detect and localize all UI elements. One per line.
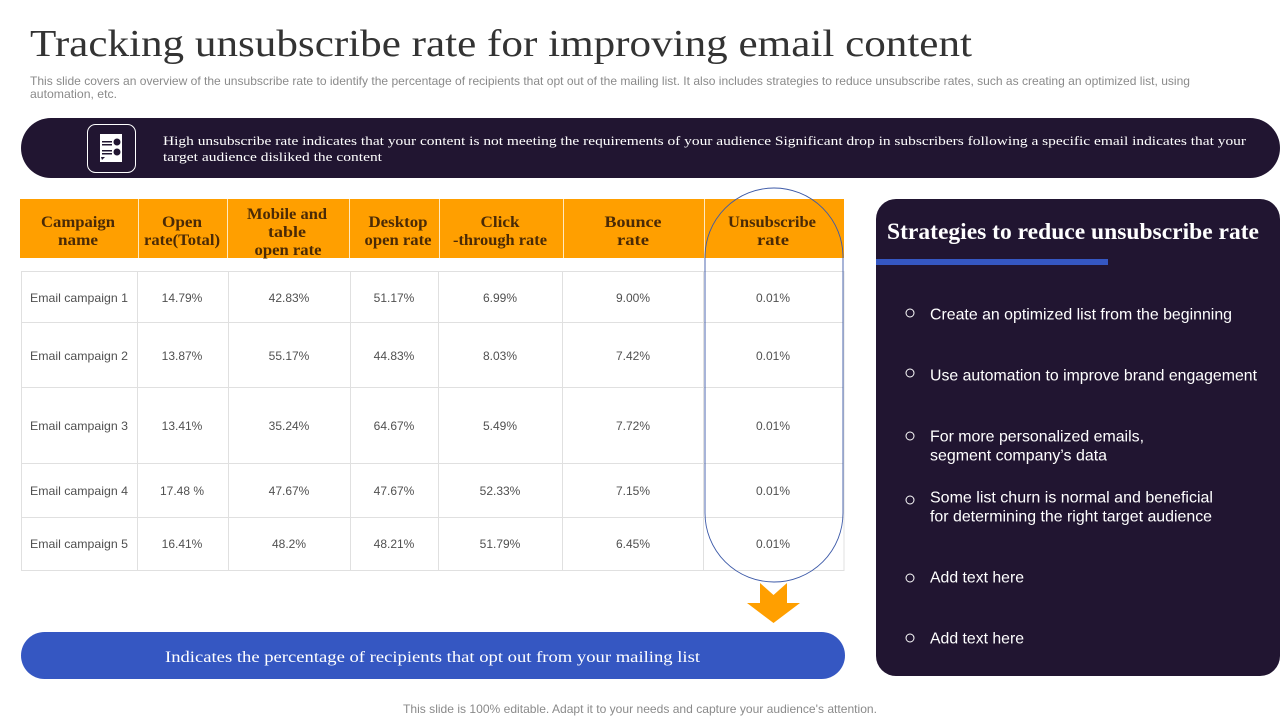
row: email campaign 2: 44.83% <box>374 349 415 363</box>
table header: Click <box>480 214 520 231</box>
row: email campaign 1: 9.00% <box>616 291 650 305</box>
row: email campaign 3: 0.01% <box>756 419 790 433</box>
row: email campaign 4: 52.33% <box>480 484 521 498</box>
row: email campaign 1 <box>30 291 790 305</box>
row: email campaign 3: 5.49% <box>483 419 517 433</box>
strategy 2: Use automation to improve brand engagement <box>930 368 1258 384</box>
footer note: This slide is 100% editable. Adapt it to your needs and capture your audience's attention. <box>403 702 877 716</box>
row: email campaign 3 <box>30 419 790 433</box>
table header: Open <box>162 214 202 231</box>
banner text: High unsubscribe rate indicates that your content is not meeting the requirements of your audience Significant drop in subscribers following a specific email indicates that your <box>163 133 1247 148</box>
row: email campaign 2: 0.01% <box>756 349 790 363</box>
row: email campaign 5: 51.79% <box>480 537 521 551</box>
row: email campaign 5: 48.2% <box>272 537 306 551</box>
table header <box>20 199 844 259</box>
panel heading: Strategies to reduce unsubscribe rate <box>887 219 1259 244</box>
strategy 3: For more personalized emails, <box>930 428 1144 446</box>
row: email campaign 5: Email campaign 5 <box>30 537 128 551</box>
row: email campaign 3: 35.24% <box>269 419 310 433</box>
row: email campaign 3: 13.41% <box>162 419 203 433</box>
row: email campaign 2: Email campaign 2 <box>30 349 128 363</box>
row: email campaign 3: 64.67% <box>374 419 415 433</box>
row: email campaign 1: 51.17% <box>374 291 415 305</box>
row: email campaign 4: 7.15% <box>616 484 650 498</box>
row: email campaign 3: Email campaign 3 <box>30 419 128 433</box>
row: email campaign 2: 55.17% <box>269 349 310 363</box>
strategy 4 <box>906 490 1213 526</box>
subtitle description: automation, etc. <box>30 87 117 101</box>
highlight outline: unsubscribe rate column <box>705 188 843 582</box>
row: email campaign 4 <box>30 484 790 498</box>
table header: rate <box>757 232 789 249</box>
strategy 3 <box>906 428 1144 464</box>
panel: strategies <box>876 199 1280 676</box>
table header: Bounce <box>604 214 662 231</box>
row: email campaign 1: 6.99% <box>483 291 517 305</box>
strategy 1: Create an optimized list from the beginning <box>930 306 1232 324</box>
title: Tracking unsubscribe rate for improving email content <box>30 23 972 65</box>
strategy 4: Some list churn is normal and beneficial <box>930 490 1213 506</box>
table header: Desktop <box>368 214 428 231</box>
table body <box>21 271 844 571</box>
row: email campaign 4: 0.01% <box>756 484 790 498</box>
row: email campaign 5: 48.21% <box>374 537 415 551</box>
heading underline <box>876 259 1108 265</box>
subtitle description <box>30 74 1190 101</box>
callout: definition: Indicates the percentage of recipients that opt out from your mailing list <box>165 649 701 666</box>
table header: Campaign <box>41 214 115 231</box>
row: email campaign 5: 0.01% <box>756 537 790 551</box>
arrow: down to callout <box>747 583 800 623</box>
row: email campaign 4: 47.67% <box>374 484 415 498</box>
row: email campaign 2 <box>30 349 790 363</box>
table header: Mobile and <box>247 206 327 223</box>
icon: email report <box>88 124 136 172</box>
table header: open rate <box>364 232 432 249</box>
row: email campaign 4: Email campaign 4 <box>30 484 128 498</box>
strategy 5: Add text here <box>930 570 1024 586</box>
strategy 4: for determining the right target audience <box>930 508 1212 526</box>
table header: rate <box>617 232 649 249</box>
row: email campaign 2: 13.87% <box>162 349 203 363</box>
table header: -through rate <box>453 232 547 249</box>
banner: key insight <box>21 118 1280 178</box>
banner text <box>163 133 1247 164</box>
row: email campaign 3: 7.72% <box>616 419 650 433</box>
subtitle description: This slide covers an overview of the unsubscribe rate to identify the percentage of recipients that opt out of the mailing list. It also includes strategies to reduce unsubscribe rates, such as creating an optimized list, using <box>30 74 1190 88</box>
row: email campaign 4: 17.48 % <box>160 484 204 498</box>
strategy 6: Add text here <box>930 630 1024 648</box>
row: email campaign 1: 14.79% <box>162 291 203 305</box>
row: email campaign 1: 0.01% <box>756 291 790 305</box>
row: email campaign 1: 42.83% <box>269 291 310 305</box>
row: email campaign 4: 47.67% <box>269 484 310 498</box>
row: email campaign 5: 16.41% <box>162 537 203 551</box>
row: email campaign 1: Email campaign 1 <box>30 291 128 305</box>
strategy 3: segment company’s data <box>930 448 1107 464</box>
table header: open rate <box>254 242 322 259</box>
row: email campaign 2: 7.42% <box>616 349 650 363</box>
table header: Unsubscribe <box>728 214 816 231</box>
banner text: target audience disliked the content <box>163 149 382 164</box>
row: email campaign 2: 8.03% <box>483 349 517 363</box>
row: email campaign 5 <box>30 537 790 551</box>
callout: definition <box>21 632 845 679</box>
table header: table <box>268 224 306 241</box>
table header: name <box>58 232 98 249</box>
table header: rate(Total) <box>144 232 220 249</box>
row: email campaign 5: 6.45% <box>616 537 650 551</box>
